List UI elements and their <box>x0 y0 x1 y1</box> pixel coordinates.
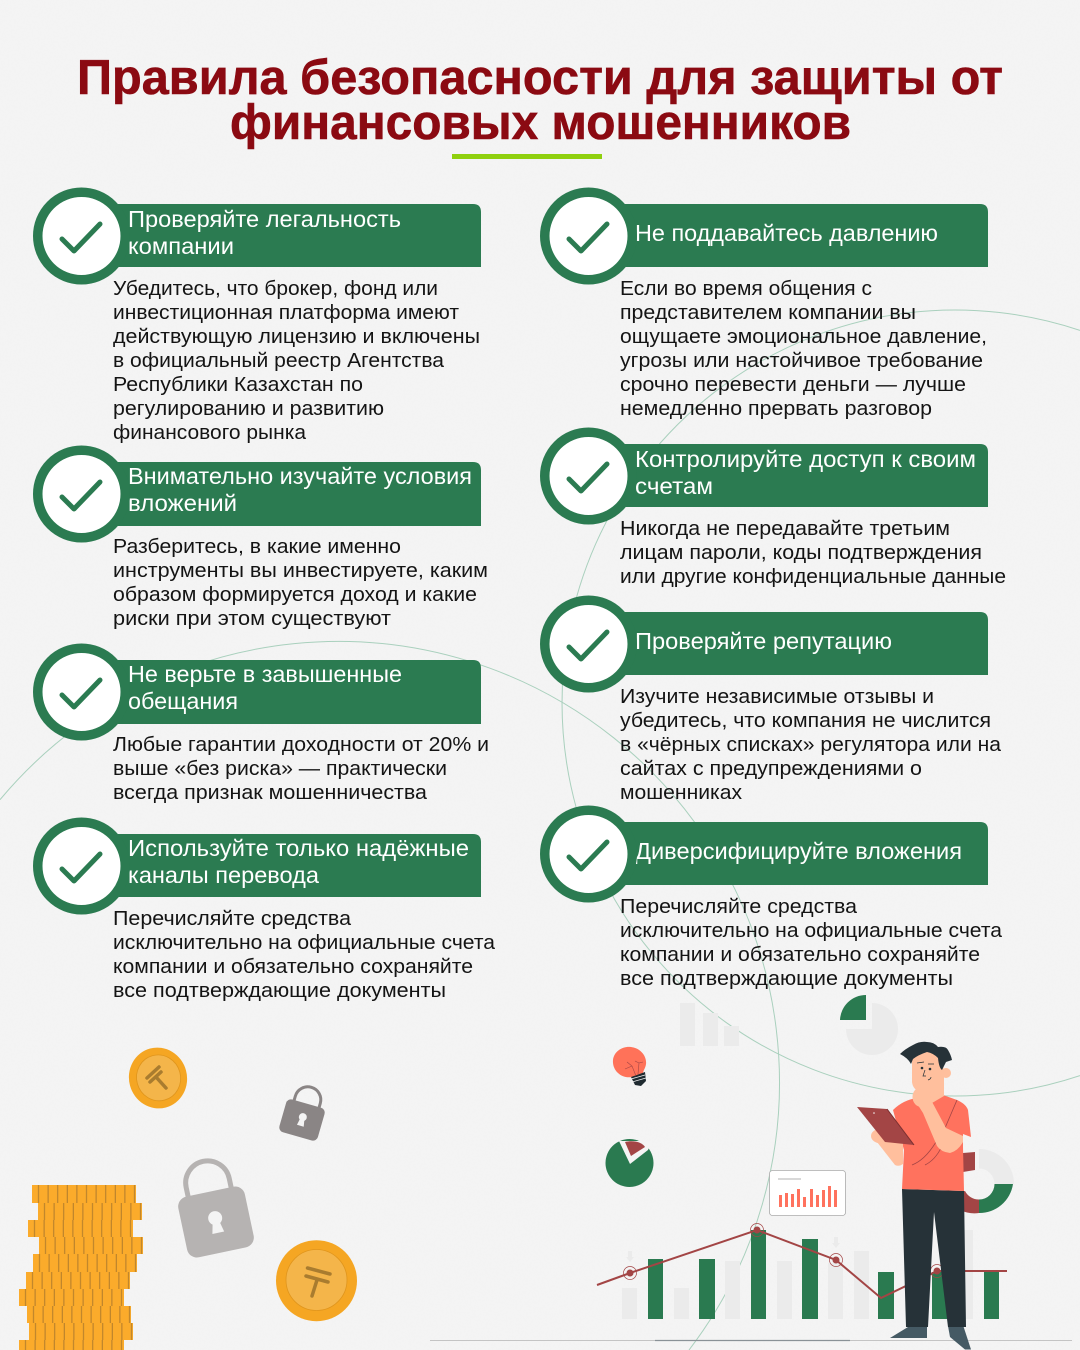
body text: или другие конфиденциальные данные <box>620 565 1006 588</box>
body text: мошенниках <box>620 781 743 804</box>
body text <box>113 907 496 1002</box>
title <box>77 51 1003 150</box>
panel: study terms <box>38 450 488 630</box>
illustration: man with tablet <box>857 1042 971 1350</box>
icon: check mark <box>38 450 125 538</box>
body text: ощущаете эмоциональное давление, <box>620 325 987 348</box>
heading bar: Внимательно изучайте условия <box>128 463 472 489</box>
body text: действующую лицензию и включены <box>113 325 480 348</box>
heading bar: Контролируйте доступ к своим <box>635 446 976 472</box>
body text: компании и обязательно сохраняйте <box>113 955 473 978</box>
heading bar: Используйте только надёжные <box>128 835 469 861</box>
panel: diversify <box>545 810 1003 990</box>
heading bar <box>607 444 988 507</box>
panel: control access <box>545 432 1006 588</box>
body text: исключительно на официальные счета <box>113 931 496 954</box>
heading bar: счетам <box>635 473 713 499</box>
body text: Убедитесь, что брокер, фонд или <box>113 277 438 300</box>
body text: Любые гарантии доходности от 20% и <box>113 733 489 756</box>
body text: финансового рынка <box>113 421 307 444</box>
icon: green pie chart <box>606 1139 654 1187</box>
icon: large tenge coin <box>276 1240 357 1321</box>
body text: исключительно на официальные счета <box>620 919 1003 942</box>
body text: компании и обязательно сохраняйте <box>620 943 980 966</box>
heading bar <box>607 204 988 267</box>
body text: в официальный реестр Агентства <box>113 349 445 372</box>
heading bar: обещания <box>128 688 238 714</box>
body text <box>113 277 480 444</box>
heading bar: Не верьте в завышенные <box>128 661 402 687</box>
panel: reliable channels <box>38 822 496 1002</box>
body text: сайтах с предупреждениями о <box>620 757 922 780</box>
body text: в «чёрных списках» регулятора или на <box>620 733 1002 756</box>
body text <box>113 535 488 630</box>
heading bar <box>100 834 481 897</box>
heading bar <box>100 660 481 724</box>
heading bar <box>607 822 988 885</box>
panel: resist pressure <box>545 192 988 420</box>
heading bar: каналы перевода <box>128 862 320 888</box>
ground line <box>430 1340 1072 1342</box>
title: Правила безопасности для защиты от <box>77 51 1003 105</box>
body text: риски при этом существуют <box>113 607 392 630</box>
heading bar <box>100 204 481 267</box>
icon: small padlock <box>278 1082 331 1142</box>
heading bar: вложений <box>128 490 237 516</box>
heading bar: Не поддавайтесь давлению <box>635 220 938 246</box>
body text: Разберитесь, в какие именно <box>113 535 401 558</box>
chart: bars and trend line <box>597 1224 1007 1319</box>
illustration: coin stack <box>19 1185 143 1350</box>
heading bar <box>607 612 988 675</box>
title: финансовых мошенников <box>230 96 851 150</box>
icon: check mark <box>545 810 632 898</box>
icon: large padlock <box>170 1154 256 1259</box>
body text <box>113 733 489 804</box>
body text <box>620 277 987 420</box>
chart: donut <box>960 1149 1014 1213</box>
body text: Если во время общения с <box>620 277 872 300</box>
body text <box>620 685 1002 804</box>
body text: угрозы или настойчивое требование <box>620 349 983 372</box>
body text: представителем компании вы <box>620 301 916 324</box>
icon: check mark <box>38 822 125 910</box>
icon: light bulb <box>613 1047 646 1086</box>
body text: выше «без риска» — практически <box>113 757 447 780</box>
icon: check mark <box>545 192 632 280</box>
icon: check mark <box>545 432 632 520</box>
body text: Республики Казахстан по <box>113 373 363 396</box>
panel: inflated promises <box>38 648 489 804</box>
body text <box>620 895 1003 990</box>
heading bar: Проверяйте легальность <box>128 206 401 232</box>
body text: лицам пароли, коды подтверждения <box>620 541 982 564</box>
body text: все подтверждающие документы <box>113 979 446 1002</box>
body text: все подтверждающие документы <box>620 967 953 990</box>
heading bar: Диверсифицируйте вложения <box>635 838 962 864</box>
body text <box>620 517 1006 588</box>
icon: check mark <box>38 648 125 736</box>
heading bar: компании <box>128 233 234 259</box>
body text: убедитесь, что компания не числится <box>620 709 991 732</box>
body text: образом формируется доход и какие <box>113 583 477 606</box>
icon: check mark <box>38 192 125 280</box>
title underline accent <box>452 154 602 159</box>
body text: Перечисляйте средства <box>113 907 352 930</box>
body text: Перечисляйте средства <box>620 895 858 918</box>
heading bar <box>100 462 481 526</box>
body text: Изучите независимые отзывы и <box>620 685 934 708</box>
icon: small tenge coin <box>122 1041 194 1115</box>
body text: срочно перевести деньги — лучше <box>620 373 966 396</box>
chart: faded grey bars top <box>680 1003 739 1046</box>
panel: check legality <box>38 192 481 444</box>
icon: check mark <box>545 600 632 688</box>
heading bar: Проверяйте репутацию <box>635 628 892 654</box>
body text: немедленно прервать разговор <box>620 397 932 420</box>
panel: check reputation <box>545 600 1002 804</box>
body text: инвестиционная платформа имеют <box>113 301 460 324</box>
body text: всегда признак мошенничества <box>113 781 428 804</box>
body text: Никогда не передавайте третьим <box>620 517 950 540</box>
body text: регулированию и развитию <box>113 397 384 420</box>
icon: grey and green pie chart <box>840 995 898 1055</box>
chart: small white card with bars <box>770 1170 846 1216</box>
body text: инструменты вы инвестируете, каким <box>113 559 488 582</box>
